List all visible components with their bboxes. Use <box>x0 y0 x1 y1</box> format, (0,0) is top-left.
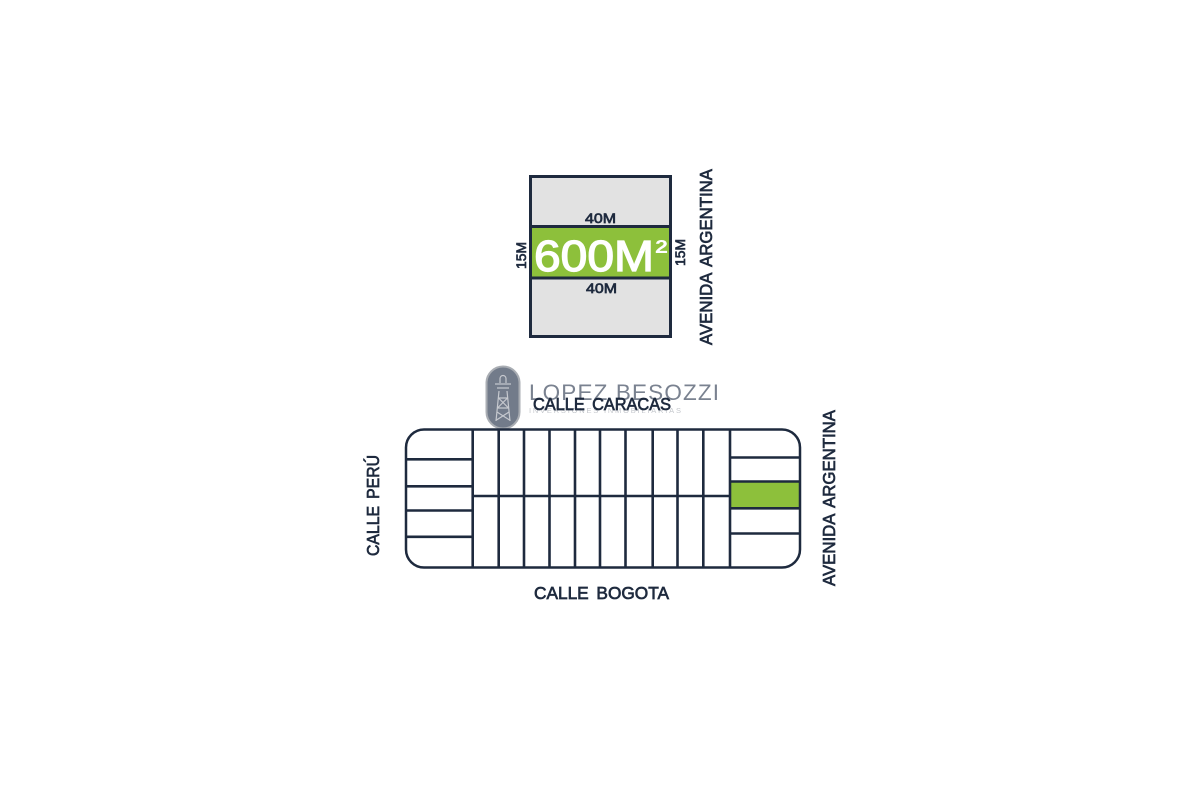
area superscript: 2 <box>655 237 668 257</box>
street label: Calle Perú: CALLE PERÚ <box>362 455 383 556</box>
street label: Avenida Argentina (detail): AVENIDA ARGENTINA <box>696 169 716 345</box>
street label: Calle Caracas: CALLE CARACAS <box>533 394 671 414</box>
lot outline <box>530 176 671 336</box>
logo wordmark: LOPEZ BESOZZI <box>529 380 719 405</box>
highlighted lot <box>530 226 671 281</box>
lot dividers <box>406 429 800 567</box>
street label: Calle Bogota: CALLE BOGOTA <box>534 583 669 603</box>
block outline <box>406 430 800 568</box>
street label: Avenida Argentina (map): AVENIDA ARGENTINA <box>819 410 839 586</box>
highlighted lot on map <box>730 482 800 508</box>
panel: block map <box>362 394 839 603</box>
logo badge <box>486 366 520 428</box>
right dimension label: 15M <box>672 239 688 266</box>
left dimension label: 15M <box>513 242 529 269</box>
watermark logo <box>486 366 719 428</box>
lot grey background <box>530 176 671 337</box>
area label: 600M <box>534 232 654 281</box>
logo tagline: INVERSIONES INMOBILIARIAS <box>529 406 681 415</box>
top dimension label: 40M <box>585 210 616 226</box>
panel: lot detail diagram <box>513 169 716 345</box>
bottom dimension label: 40M <box>586 280 617 296</box>
